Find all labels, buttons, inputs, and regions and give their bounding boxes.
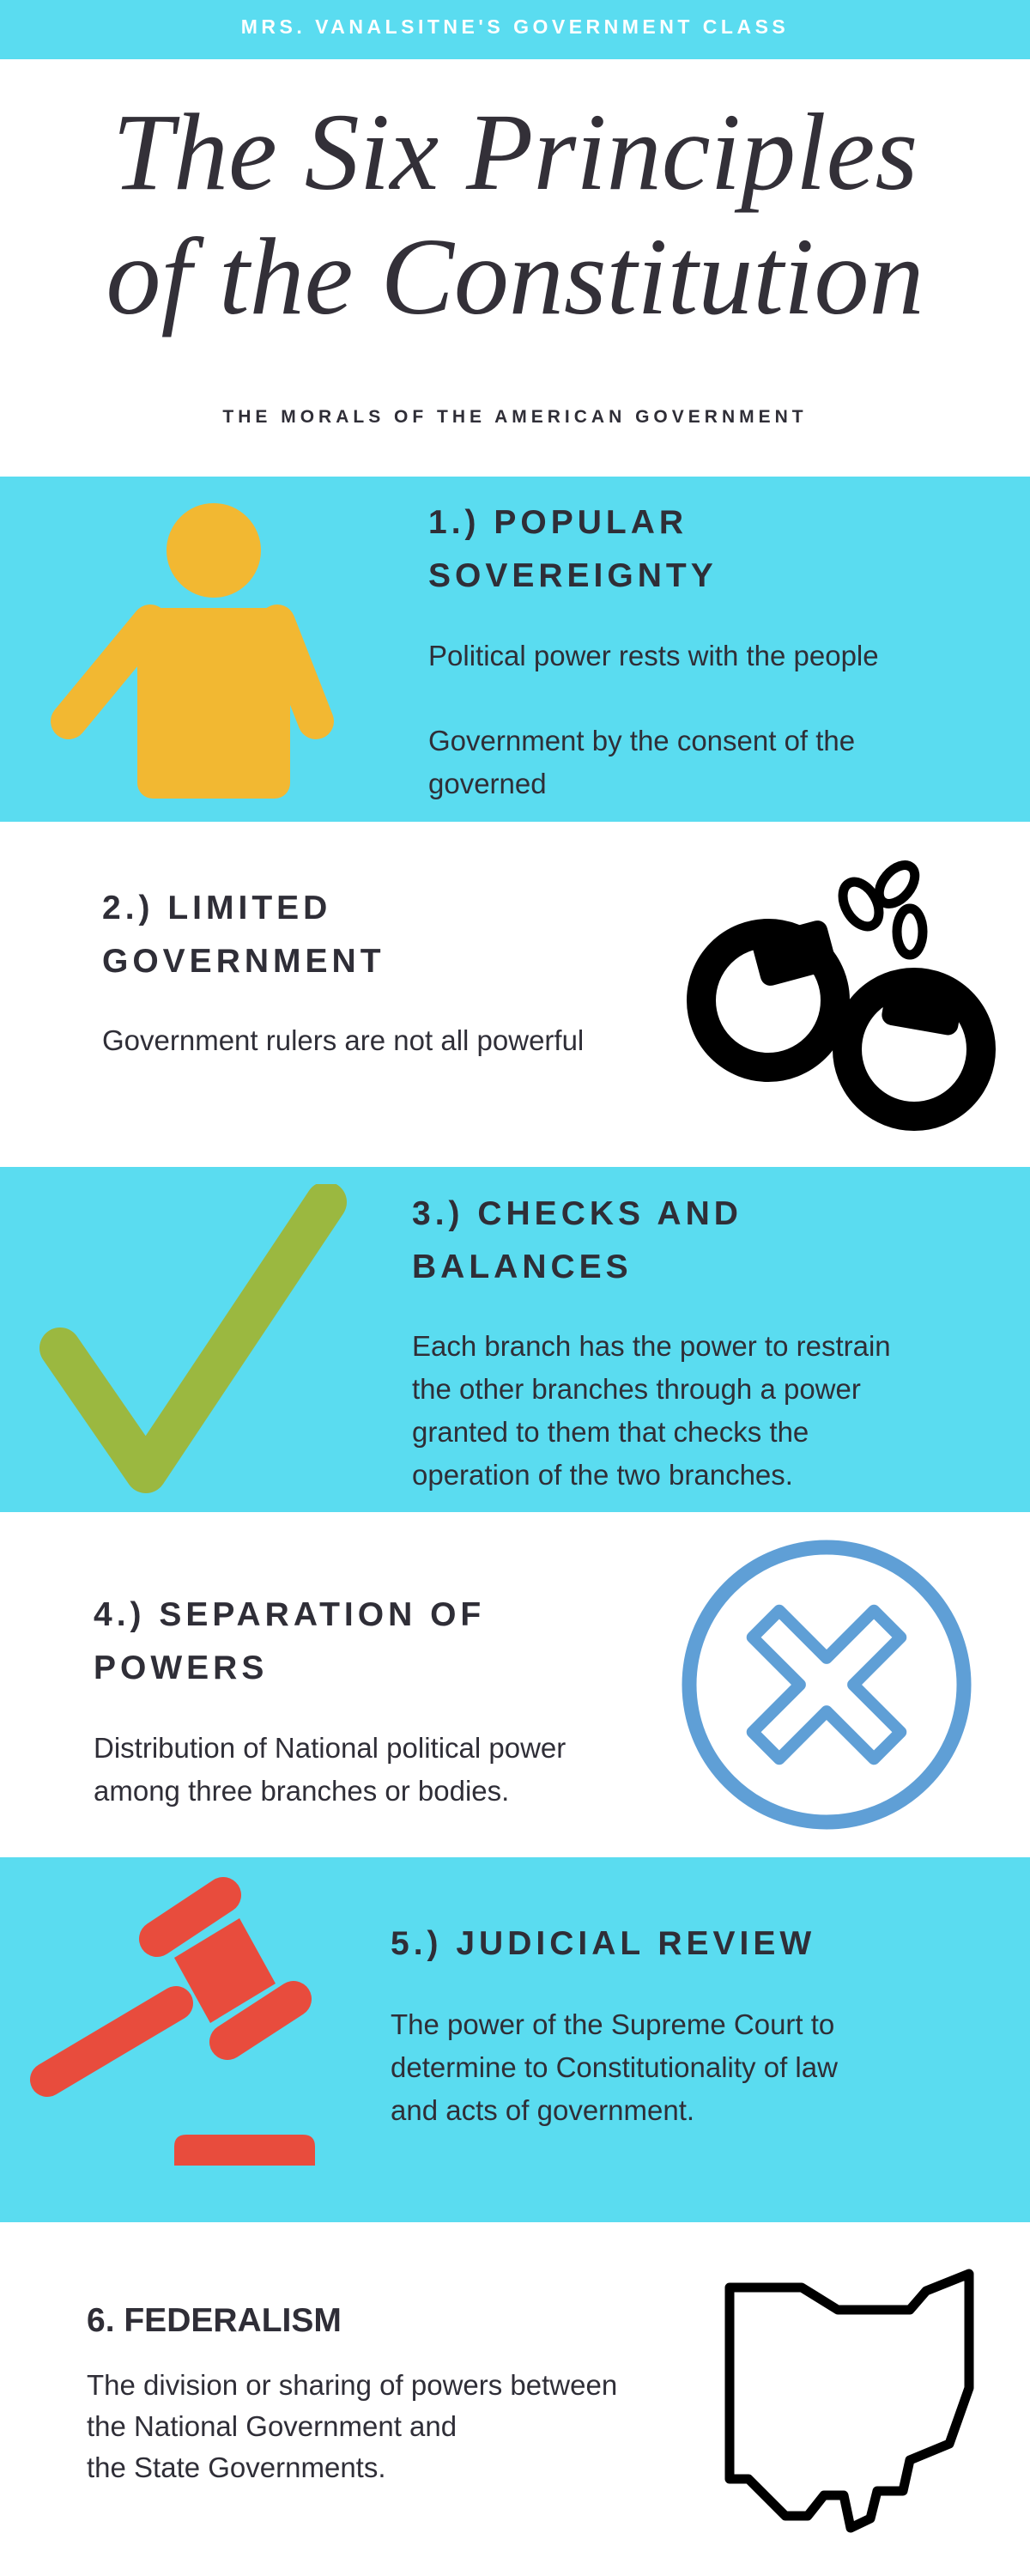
heading: separation of powers [94,1596,485,1686]
text: separation of powers [94,1732,566,1807]
text: checks and balances: Each branch has the power to restrain [412,1330,891,1362]
text: federalism [87,2369,617,2483]
text: checks and balances: granted to them that checks the [412,1416,809,1448]
heading: popular sovereignty: 1.) POPULAR [428,504,688,541]
text: consent [428,725,855,799]
text: popular sovereignty: Political power rests with the people [428,640,879,671]
panel: popular sovereignty [0,477,1030,822]
icon: gavel [30,1877,315,2166]
icon: person [51,503,334,799]
text: federalism: the State Governments. [87,2451,386,2483]
heading: federalism: 6. FEDERALISM [87,2302,342,2339]
heading: popular sovereignty [428,504,718,594]
text: checks and balances [412,1330,891,1491]
panel: checks and balances [0,1167,1030,1512]
heading: checks and balances: BALANCES [412,1249,633,1285]
heading: limited government: GOVERNMENT [102,943,385,980]
title [106,91,924,337]
text: separation of powers: among three branches or bodies. [94,1775,509,1807]
text: judicial review [391,2008,838,2126]
subtitle: THE MORALS OF THE AMERICAN GOVERNMENT [222,407,808,427]
header bar [0,0,1030,59]
text: judicial review: and acts of government. [391,2094,694,2126]
text: federalism: the National Government and [87,2410,457,2442]
heading: separation of powers: POWERS [94,1649,268,1686]
text: federalism: The division or sharing of powers between [87,2369,617,2401]
icon: x in circle [682,1540,972,1829]
panel: federalism [87,2269,973,2533]
panel: judicial review [0,1857,1030,2222]
text: judicial review: The power of the Supreme Court to [391,2008,834,2040]
text: judicial review: determine to Constitutionality of law [391,2051,838,2083]
icon: check mark [39,1184,347,1493]
title: The Six Principles [112,91,918,213]
icon: ohio outline [724,2269,973,2533]
icon: handcuffs [687,860,996,1131]
heading: checks and balances: 3.) CHECKS AND [412,1195,742,1232]
text: checks and balances: the other branches through a power [412,1373,861,1405]
text: consent: governed [428,768,547,799]
title: of the Constitution [106,216,924,337]
panel: separation of powers [94,1540,972,1829]
heading: limited government: 2.) LIMITED [102,890,331,927]
heading: limited government [102,890,385,980]
heading: popular sovereignty: SOVEREIGNTY [428,557,718,594]
heading: separation of powers: 4.) SEPARATION OF [94,1596,485,1633]
heading: judicial review: 5.) JUDICIAL REVIEW [391,1925,815,1962]
text: separation of powers: Distribution of National political power [94,1732,566,1764]
panel: limited government [102,860,996,1131]
header text: MRS. VANALSITNE'S GOVERNMENT CLASS [241,15,789,38]
text: limited government: Government rulers are not all powerful [102,1024,584,1056]
text: consent: Government by the consent of the [428,725,855,756]
heading: checks and balances [412,1195,742,1285]
text: checks and balances: operation of the two branches. [412,1459,793,1491]
